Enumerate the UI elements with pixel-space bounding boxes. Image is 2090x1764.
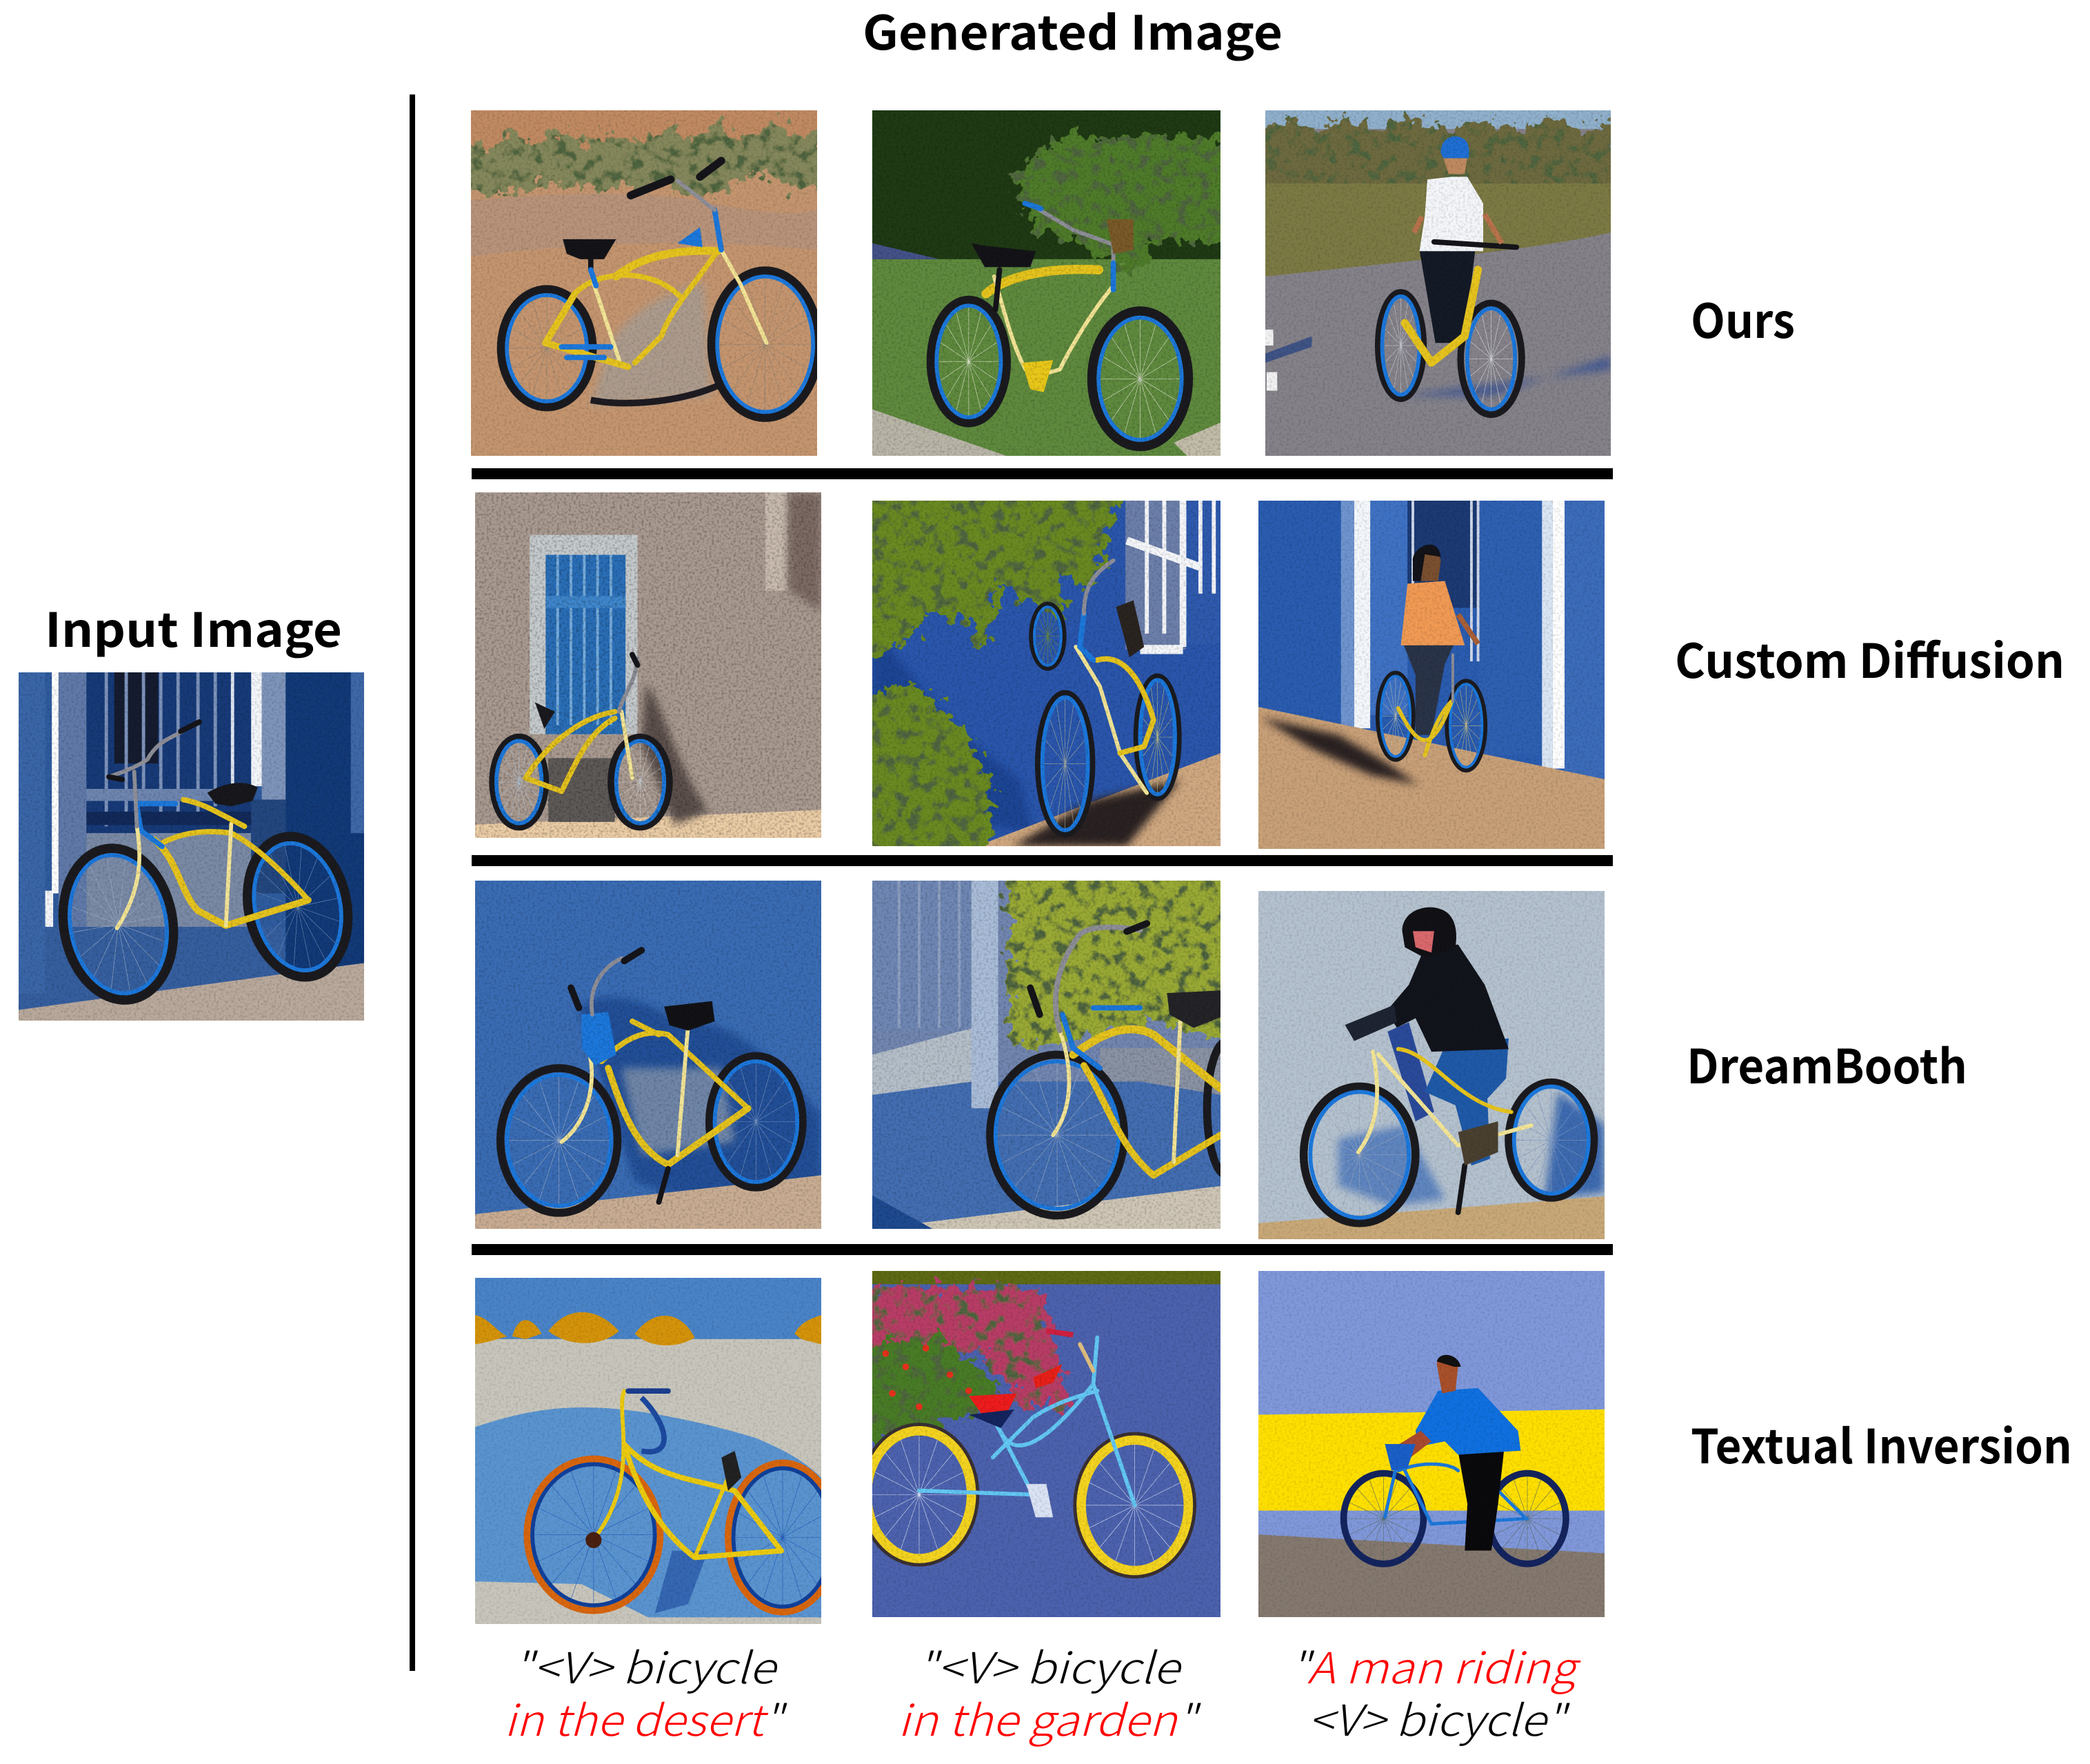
caption: in the desert: "<V> bicycle xyxy=(513,1634,778,1696)
caption: in the garden: in the garden " xyxy=(898,1686,1201,1748)
bicycle with rider xyxy=(1304,908,1594,1223)
divider: row rule 2 xyxy=(472,855,1613,866)
heading: Input Image: Input Image xyxy=(45,592,342,661)
label: Textual Inversion: Textual Inversion xyxy=(1691,1409,2072,1477)
label: DreamBooth: DreamBooth xyxy=(1687,1029,1967,1097)
divider: row rule 3 xyxy=(472,1244,1613,1255)
label: Ours: Ours xyxy=(1691,283,1795,352)
bicycle xyxy=(861,1331,1194,1576)
image: Custom Diffusion garden xyxy=(872,501,1220,846)
image: Textual Inversion desert xyxy=(475,1278,821,1624)
bicycle xyxy=(931,203,1188,447)
image: Ours desert xyxy=(471,110,817,456)
bicycle xyxy=(501,161,818,417)
image: input bicycle photo xyxy=(19,672,364,1021)
caption: in the garden: "<V> bicycle xyxy=(917,1634,1183,1696)
caption: in the desert: in the desert " xyxy=(504,1686,787,1748)
label: Custom Diffusion: Custom Diffusion xyxy=(1675,623,2064,692)
caption: in the garden xyxy=(898,1634,1201,1748)
bicycle with rider xyxy=(1378,545,1485,770)
caption: in the desert xyxy=(504,1634,787,1748)
caption: a man riding xyxy=(1290,1634,1581,1748)
image: Ours riding xyxy=(1265,110,1611,456)
bicycle with rider xyxy=(1378,137,1522,414)
divider: row rule 1 xyxy=(472,468,1613,479)
bicycle with rider xyxy=(1344,1355,1566,1564)
bicycle xyxy=(990,923,1247,1216)
image: Custom Diffusion desert xyxy=(475,492,821,838)
bicycle xyxy=(52,722,361,1009)
bicycle xyxy=(492,654,670,828)
image: DreamBooth desert xyxy=(475,881,821,1229)
bicycle xyxy=(501,950,803,1213)
image: DreamBooth garden xyxy=(872,881,1220,1229)
image: Ours garden xyxy=(872,110,1220,456)
image: Custom Diffusion riding xyxy=(1258,501,1605,849)
bicycle xyxy=(527,1391,837,1614)
divider: vertical separator xyxy=(410,94,415,1671)
image: DreamBooth riding xyxy=(1258,891,1605,1239)
image: Textual Inversion riding xyxy=(1258,1271,1605,1617)
caption: a man riding: "A man riding xyxy=(1290,1634,1581,1696)
image: Textual Inversion garden xyxy=(872,1271,1220,1617)
bicycle xyxy=(1032,561,1179,834)
caption: a man riding: <V> bicycle" xyxy=(1308,1686,1570,1748)
